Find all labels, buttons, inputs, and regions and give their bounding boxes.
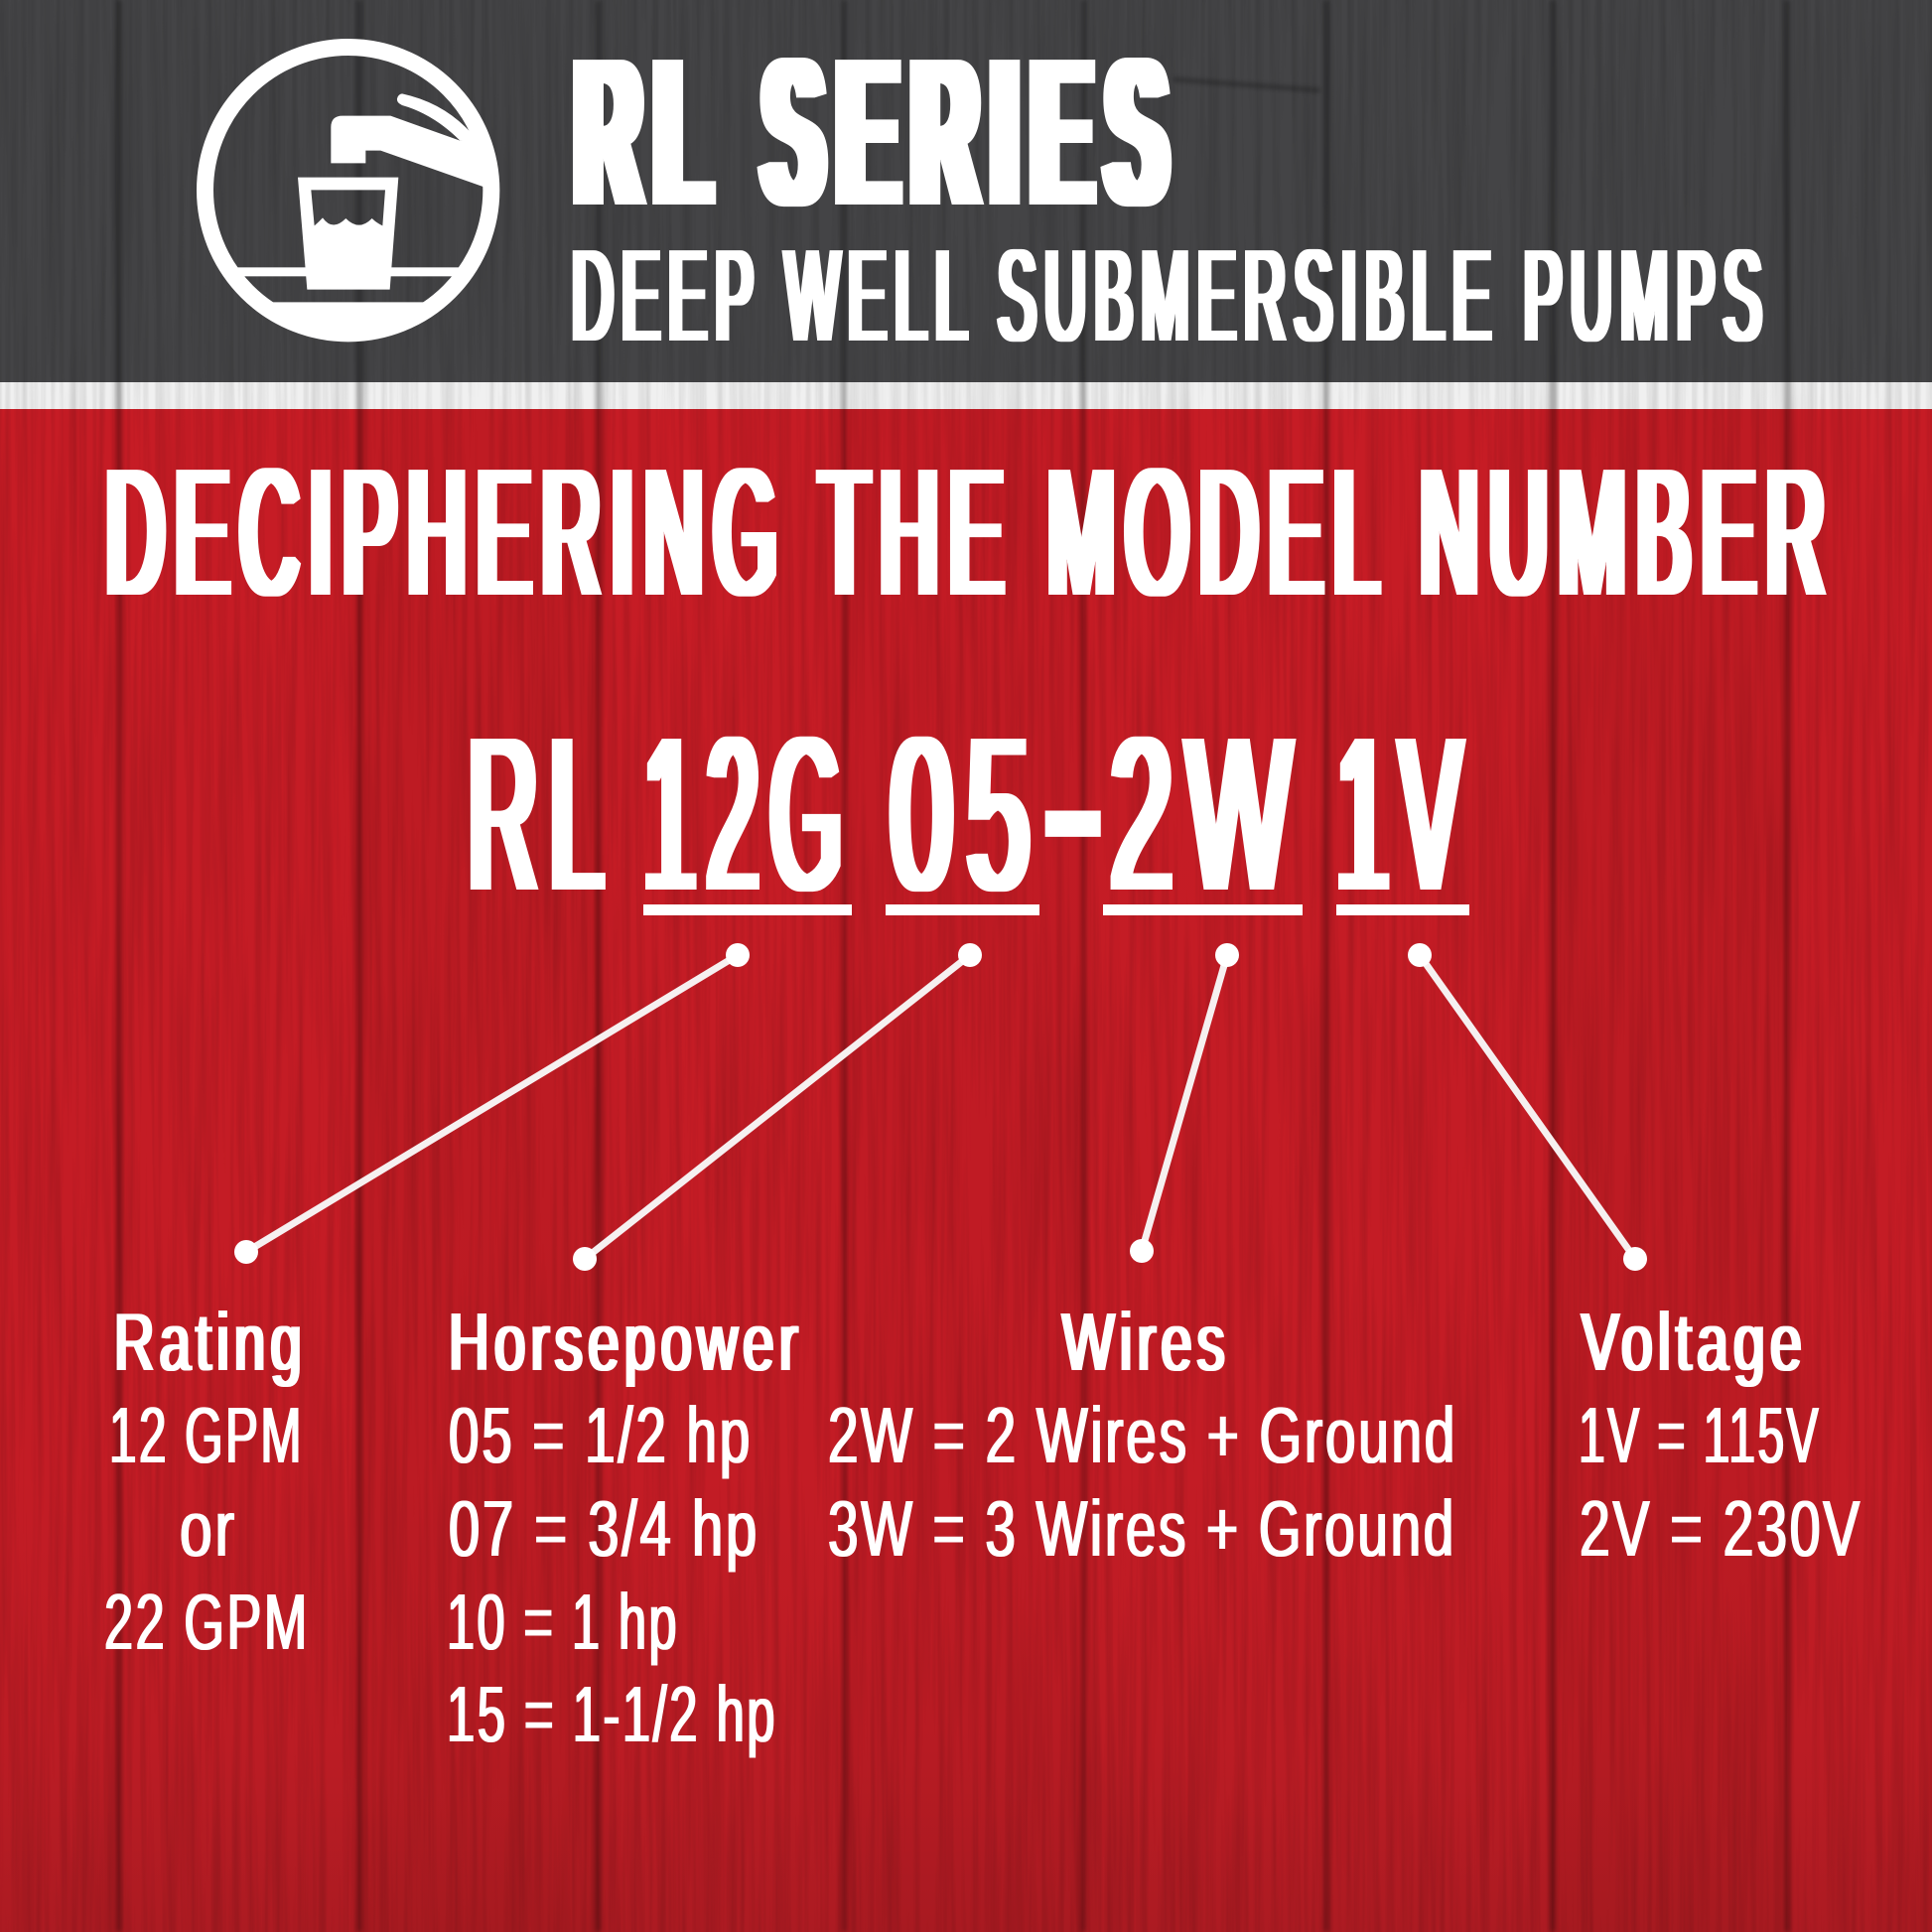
connector: horsepower [573,943,982,1271]
model number: RL 12G 05-2W 1V: 12G [644,691,854,936]
column: wires: 2W = 2 Wires + Ground [828,1391,1457,1479]
column: voltage: Voltage [1582,1296,1807,1388]
model number: RL 12G 05-2W 1V: - [1036,682,1110,927]
model number: RL 12G 05-2W 1V: RL [469,691,616,936]
column: wires: Wires [1062,1296,1230,1388]
connector: rating [234,943,750,1264]
column: horsepower: 05 = 1/2 hp [449,1391,753,1479]
icon: faucet filling a glass inside a circle [205,47,491,334]
column: voltage [1579,1296,1863,1573]
column: horsepower [447,1296,803,1758]
column: horsepower: 07 = 3/4 hp [449,1484,759,1573]
column: wires [828,1296,1457,1573]
model number: RL 12G 05-2W 1V: 05 [891,691,1044,936]
column: horsepower: 10 = 1 hp [447,1578,679,1666]
column: rating: or [180,1484,237,1573]
column: wires: 3W = 3 Wires + Ground [828,1484,1456,1573]
infographic: RL series model number: 1V [1337,691,1473,936]
model number: RL 12G 05-2W 1V [469,682,1473,936]
column: horsepower: 15 = 1-1/2 hp [447,1670,777,1758]
column: rating: Rating [114,1296,307,1388]
model number: RL 12G 05-2W 1V: 2W [1111,691,1306,936]
connector: voltage [1408,943,1647,1271]
column: rating [104,1296,310,1666]
connector: wires [1130,943,1239,1263]
column: rating: 22 GPM [104,1578,310,1666]
column: rating: 12 GPM [109,1391,304,1479]
column: horsepower: Horsepower [449,1296,803,1388]
